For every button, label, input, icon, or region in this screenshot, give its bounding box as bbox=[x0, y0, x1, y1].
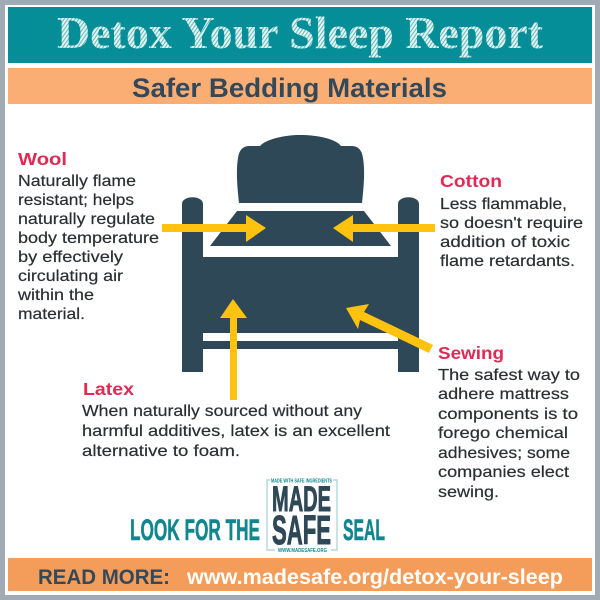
text block: cotton: flame retardants. bbox=[440, 253, 575, 270]
text block: sewing: sewing. bbox=[438, 484, 499, 501]
title banner: Detox Your Sleep Report bbox=[57, 7, 544, 58]
text block: sewing: components is to bbox=[438, 406, 578, 423]
text block: wool: within the bbox=[17, 287, 94, 304]
text block: wool: body temperature bbox=[18, 230, 159, 247]
text block: wool: by effectively bbox=[18, 249, 123, 266]
text block: sewing: adhesives; some bbox=[438, 445, 570, 462]
made safe seal callout bbox=[130, 478, 385, 554]
text block: sewing: companies elect bbox=[438, 464, 570, 481]
text block: wool bbox=[17, 149, 159, 323]
text block: cotton: addition of toxic bbox=[440, 234, 570, 251]
footer bar bbox=[8, 558, 592, 591]
seal badge: WWW.MADESAFE.ORG bbox=[278, 548, 327, 554]
text block: sewing: The safest way to bbox=[438, 367, 580, 384]
text block: cotton: Less flammable, bbox=[440, 196, 567, 213]
text block: cotton: so doesn't require bbox=[440, 215, 583, 232]
text block: sewing: Sewing bbox=[438, 343, 504, 363]
text block: wool: circulating air bbox=[18, 268, 124, 285]
text block: wool: resistant; helps bbox=[18, 192, 134, 209]
text block: wool: Naturally flame bbox=[18, 173, 136, 190]
arrow: cotton bbox=[333, 215, 435, 242]
subtitle banner bbox=[8, 68, 592, 104]
text block: wool: Wool bbox=[18, 149, 67, 169]
text block: cotton bbox=[440, 171, 583, 270]
text block: latex: harmful additives, latex is an excellent bbox=[82, 423, 391, 440]
arrow: wool bbox=[162, 215, 266, 242]
arrow: latex bbox=[220, 299, 247, 400]
text block: latex: When naturally sourced without any bbox=[82, 403, 362, 420]
arrow: sewing bbox=[346, 304, 433, 353]
subtitle banner: Safer Bedding Materials bbox=[132, 73, 447, 103]
text block: latex bbox=[82, 379, 391, 460]
text block: latex: Latex bbox=[83, 379, 134, 399]
text block: sewing bbox=[438, 343, 580, 501]
footer bar: READ MORE: bbox=[38, 566, 170, 589]
made safe seal callout: SEAL bbox=[343, 514, 385, 547]
footer bar: www.madesafe.org/detox-your-sleep bbox=[186, 566, 563, 589]
seal badge: MADE bbox=[272, 480, 331, 519]
text block: cotton: Cotton bbox=[440, 171, 502, 191]
text block: wool: material. bbox=[18, 306, 85, 323]
text block: wool: naturally regulate bbox=[18, 211, 155, 228]
seal badge bbox=[267, 478, 337, 554]
seal badge: MADE WITH SAFE INGREDIENTS bbox=[271, 478, 332, 484]
bed illustration bbox=[182, 135, 419, 372]
text block: latex: alternative to foam. bbox=[82, 443, 240, 460]
text block: sewing: forego chemical bbox=[438, 425, 568, 442]
seal badge: SAFE bbox=[272, 507, 331, 553]
made safe seal callout: LOOK FOR THE bbox=[130, 514, 260, 547]
text block: sewing: adhere mattress bbox=[438, 386, 569, 403]
